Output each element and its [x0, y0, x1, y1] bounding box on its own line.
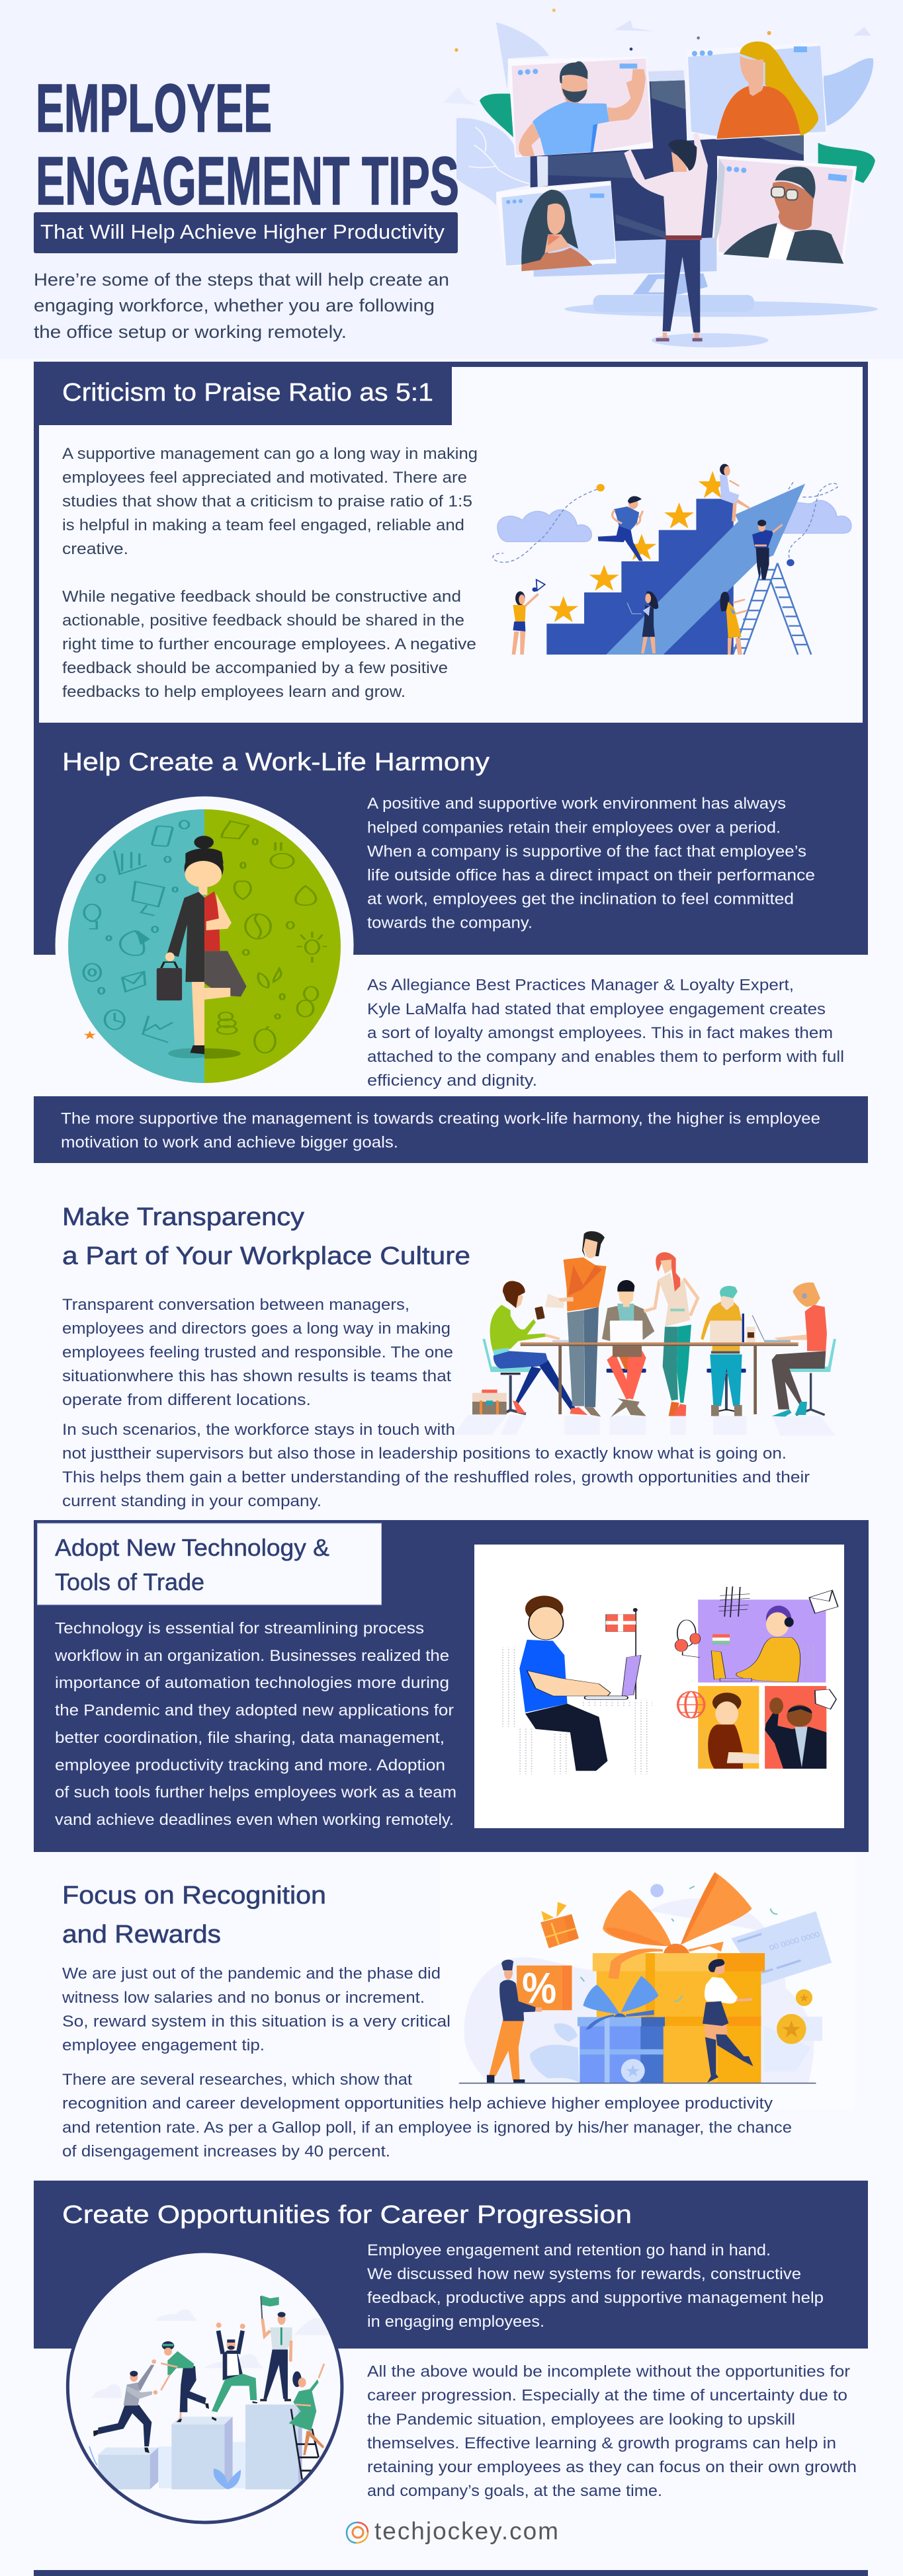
big gift: [593, 1872, 765, 2083]
chairs: [482, 1314, 836, 1415]
panel: recognition and rewards: [62, 1854, 855, 2161]
illustration: video call team: [443, 9, 878, 347]
body text: the Pandemic and they adopted new applications for: [55, 1702, 454, 1719]
helper in green: [161, 2341, 209, 2422]
heading: [62, 1882, 326, 1949]
intro text: [34, 270, 449, 342]
worker in yellow tile: [698, 1693, 759, 1769]
body text dark: the Pandemic situation, employees are looking to upskill: [367, 2411, 795, 2429]
body text light: A positive and supportive work environment has always: [367, 795, 786, 813]
body text dark: All the above would be incomplete without the opportunities for: [367, 2363, 850, 2380]
body text: situationwhere this has shown results is teams that: [62, 1367, 451, 1385]
person: yellow jacket: [701, 1286, 755, 1416]
body text: Transparent conversation between managers,: [62, 1296, 409, 1314]
agent in purple tile: [711, 1605, 817, 1682]
body text dark: efficiency and dignity.: [367, 1072, 537, 1090]
panel: criticism to praise ratio: [34, 362, 868, 725]
body text dark: attached to the company and enables them to perform with full: [367, 1048, 844, 1066]
bottom callout bar: The more supportive the management is towards creating work-life harmony, the higher is employee: [61, 1109, 820, 1128]
window: man: [507, 57, 653, 157]
panel: header: [0, 0, 903, 359]
body text dark: a sort of loyalty amongst employees. This in fact makes them: [367, 1024, 833, 1042]
blue gift: [578, 1976, 665, 2083]
body text light: in engaging employees.: [367, 2313, 544, 2331]
man with flag: [260, 2296, 292, 2401]
climber in grey: [93, 2359, 157, 2453]
body text: recognition and career development opportunities help achieve higher employee productivity: [62, 2095, 773, 2113]
illustration: half work half life circle: [56, 796, 353, 1095]
worker in red tile: [765, 1697, 826, 1769]
body text light: Employee engagement and retention go hand in hand.: [367, 2241, 771, 2259]
illustration: remote working: [474, 1545, 844, 1828]
heading box: Tools of Trade: [55, 1568, 204, 1595]
heading tab: [34, 362, 452, 425]
body text: current standing in your company.: [62, 1492, 322, 1510]
illustration: gifts: [441, 1854, 855, 2109]
subtitle banner: [34, 212, 458, 253]
illustration: climbing podium circle: [67, 2251, 342, 2522]
panel: career progression: [34, 2181, 868, 2576]
title: EMPLOYEE: [36, 70, 272, 146]
body text: employees feeling trusted and responsible. The one: [62, 1344, 453, 1361]
plant: [214, 2468, 241, 2489]
body text: of such tools further helps employees work as a team: [55, 1784, 456, 1801]
icon: logo ring: [347, 2522, 368, 2543]
intro text: Here’re some of the steps that will help create an: [34, 270, 449, 290]
illustration: gifts: 00 0000 0000: [768, 1930, 821, 1952]
heading: [62, 1203, 470, 1270]
heading: Make Transparency: [62, 1203, 304, 1231]
panel: work-life harmony: [34, 723, 868, 1163]
subtitle banner: That Will Help Achieve Higher Productivity: [40, 220, 445, 243]
body text light: helped companies retain their employees over a period.: [367, 819, 781, 837]
person: orange sweater: [545, 1231, 607, 1417]
body text: [62, 1965, 792, 2161]
title: [36, 70, 459, 219]
person: red shirt: [752, 1283, 827, 1417]
logo: techjockey.com: techjockey.com: [374, 2518, 558, 2544]
heading tab: Criticism to Praise Ratio as 5:1: [62, 379, 433, 407]
heading box: [37, 1523, 381, 1605]
body text: This helps them gain a better understanding of the reshuffled roles, growth opportunities and their: [62, 1469, 810, 1486]
body text: better coordination, file sharing, data management,: [55, 1729, 445, 1747]
body text: Technology is essential for streamlining process: [55, 1620, 424, 1637]
body text: studies that show that a criticism to praise ratio of 1:5: [62, 493, 472, 510]
window: woman with yellow hair: [687, 42, 828, 140]
coins: [650, 1884, 812, 2044]
heading: a Part of Your Workplace Culture: [62, 1242, 470, 1270]
window: woman with dark hair: [496, 182, 617, 271]
body text: operate from different locations.: [62, 1391, 311, 1409]
body text dark: [367, 2363, 857, 2500]
heading box: Adopt New Technology &: [55, 1534, 329, 1561]
body text dark: Kyle LaMalfa had stated that employee engagement creates: [367, 1000, 826, 1018]
footer bar: [34, 2570, 868, 2576]
body text light: [367, 2241, 824, 2331]
body text: importance of automation technologies more during: [55, 1674, 449, 1692]
intro text: the office setup or working remotely.: [34, 322, 347, 342]
body text: witness low salaries and no bonus or increment.: [62, 1989, 425, 2007]
small gift: [540, 1902, 579, 1949]
body text light: towards the company.: [367, 914, 533, 932]
ladder: [291, 2409, 319, 2479]
panel: adopt new technology: [34, 1520, 869, 1852]
body text: In such scenarios, the workforce stays in touch with: [62, 1421, 455, 1439]
body text dark: As Allegiance Best Practices Manager & Loyalty Expert,: [367, 976, 794, 994]
body text dark: career progression. Especially at the time of uncertainty due to: [367, 2387, 847, 2404]
desk: [521, 1342, 798, 1414]
body text: employee engagement tip.: [62, 2036, 265, 2054]
body text light: feedback, productive apps and supportive management help: [367, 2289, 824, 2307]
body text: is helpful in making a team feel engaged, reliable and: [62, 516, 464, 534]
illustration: staircase with stars: [493, 464, 851, 655]
heading: Help Create a Work-Life Harmony: [62, 748, 490, 776]
body text: feedbacks to help employees learn and grow.: [62, 683, 406, 701]
body text light: We discussed how new systems for rewards, constructive: [367, 2265, 801, 2283]
body text: workflow in an organization. Businesses realized the: [54, 1647, 449, 1665]
bottom callout bar: motivation to work and achieve bigger goals.: [61, 1133, 398, 1152]
body text: There are several researches, which show that: [62, 2071, 412, 2089]
body text: employee productivity tracking and more. Adoption: [55, 1756, 445, 1775]
body text: of disengagement increases by 40 percent.: [62, 2142, 390, 2161]
body text: So, reward system in this situation is a very critical: [62, 2013, 451, 2031]
person: green shirt: [490, 1281, 587, 1415]
body text: feedback should be accompanied by a few positive: [62, 659, 448, 677]
person: standing woman: [644, 1252, 698, 1416]
body text: employees and directors goes a long way in making: [62, 1320, 451, 1338]
window: man with glasses: [713, 156, 857, 264]
body text: and retention rate. As per a Gallop poll, if an employee is ignored by his/her manager, the chance: [62, 2118, 792, 2137]
bottom callout bar: [34, 1096, 868, 1163]
body text light: [367, 795, 815, 932]
body text light: When a company is supportive of the fact that employee’s: [367, 842, 806, 861]
illustration: team at desk: [454, 1231, 836, 1436]
woman dancing: [703, 1959, 753, 2083]
tile icons: [677, 1586, 838, 1709]
man with percent box: %: [522, 1964, 556, 2013]
heading: Create Opportunities for Career Progression: [62, 2201, 632, 2229]
figures on stairs: [512, 464, 783, 655]
body text light: at work, employees get the inclination to feel committed: [367, 890, 794, 908]
briefcase: [472, 1390, 507, 1414]
body text dark: retaining your employees as they can focus on their own growth: [367, 2458, 857, 2476]
ladder: [733, 562, 811, 655]
body text: [62, 445, 478, 701]
body text: [54, 1620, 456, 1829]
body text dark: themselves. Effective learning & growth programs can help in: [367, 2435, 836, 2452]
body text: We are just out of the pandemic and the phase did: [62, 1965, 441, 1982]
body text: employees feel appreciated and motivated. There are: [62, 469, 467, 487]
body text: vand achieve deadlines even when working remotely.: [55, 1811, 454, 1829]
body text: While negative feedback should be constructive and: [62, 588, 461, 606]
panel: transparency: [62, 1203, 836, 1510]
body text dark: [367, 976, 844, 1090]
woman in green dress: [289, 2364, 324, 2455]
heading: and Rewards: [62, 1921, 221, 1949]
body text: [62, 1296, 810, 1510]
body text dark: and company’s goals, at the same time.: [367, 2482, 662, 2500]
body text: not justtheir supervisors but also those in leadership positions to exactly know what is going on.: [62, 1445, 787, 1463]
body text light: life outside office has a direct impact on their performance: [367, 866, 815, 885]
intro text: engaging workforce, whether you are following: [34, 296, 435, 315]
body text: creative.: [62, 540, 128, 558]
body text: right time to further encourage employees. A negative: [62, 635, 476, 653]
person facing monitor: [624, 133, 708, 341]
heading: Focus on Recognition: [62, 1882, 326, 1910]
body text: A supportive management can go a long way in making: [62, 445, 478, 463]
man with percent box: [487, 1960, 572, 2083]
person: seated centre: [602, 1280, 654, 1417]
body text: actionable, positive feedback should be shared in the: [62, 612, 464, 629]
title: ENGAGEMENT TIPS: [36, 143, 459, 219]
cheering man: [212, 2323, 257, 2421]
